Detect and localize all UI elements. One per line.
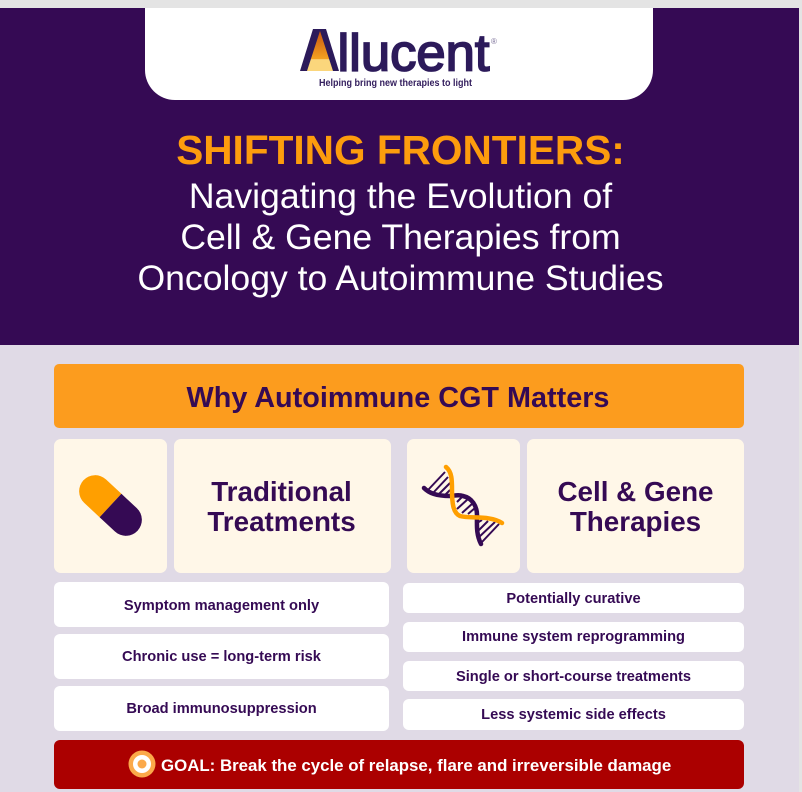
title: SHIFTING FRONTIERS: <box>176 127 625 173</box>
card: traditional treatments: Traditional <box>211 476 352 507</box>
subtitle: Navigating the Evolution of <box>189 176 612 216</box>
section heading bar: Why Autoimmune CGT Matters <box>187 382 609 414</box>
subtitle <box>137 176 664 298</box>
right item: immune reprogramming <box>403 622 744 652</box>
logo: llucent <box>338 24 490 82</box>
subtitle: Oncology to Autoimmune Studies <box>137 258 664 298</box>
left item: chronic use: Chronic use = long-term risk <box>122 649 321 665</box>
logo: Helping bring new therapies to light <box>319 78 473 89</box>
right item: less side effects <box>403 699 744 730</box>
card: cell and gene therapies <box>527 439 744 573</box>
left item: broad immunosuppression <box>54 686 389 731</box>
right edge strip <box>799 8 802 792</box>
right item: less side effects: Less systemic side effects <box>481 706 666 722</box>
goal banner <box>54 740 744 789</box>
card: cell and gene therapies: Cell & Gene <box>557 476 714 507</box>
card: traditional treatments <box>174 439 391 573</box>
left item: broad immunosuppression: Broad immunosuppression <box>126 700 317 716</box>
header band <box>0 8 799 345</box>
icon: DNA helix <box>422 464 504 546</box>
section heading bar <box>54 364 744 428</box>
icon card: pill <box>54 439 167 573</box>
goal text: GOAL: Break the cycle of relapse, flare and irreversible damage <box>161 756 671 775</box>
icon: target <box>128 750 156 778</box>
right item: short-course treatments: Single or short-course treatments <box>456 669 691 685</box>
right item: potentially curative: Potentially curative <box>506 591 641 607</box>
card: cell and gene therapies: Therapies <box>570 506 701 537</box>
logo: ® <box>491 37 497 46</box>
left item: symptom management: Symptom management only <box>124 598 319 614</box>
right item: short-course treatments <box>403 661 744 691</box>
right item: potentially curative <box>403 583 744 613</box>
left item: chronic use <box>54 634 389 679</box>
icon card: DNA <box>407 439 520 573</box>
left item: symptom management <box>54 582 389 627</box>
top browser strip <box>0 0 802 8</box>
card: traditional treatments: Treatments <box>207 506 356 537</box>
right item: immune reprogramming: Immune system reprogramming <box>462 629 685 645</box>
icon: capsule <box>79 475 142 536</box>
logo panel <box>145 8 653 100</box>
subtitle: Cell & Gene Therapies from <box>180 217 621 257</box>
logo <box>300 24 497 89</box>
